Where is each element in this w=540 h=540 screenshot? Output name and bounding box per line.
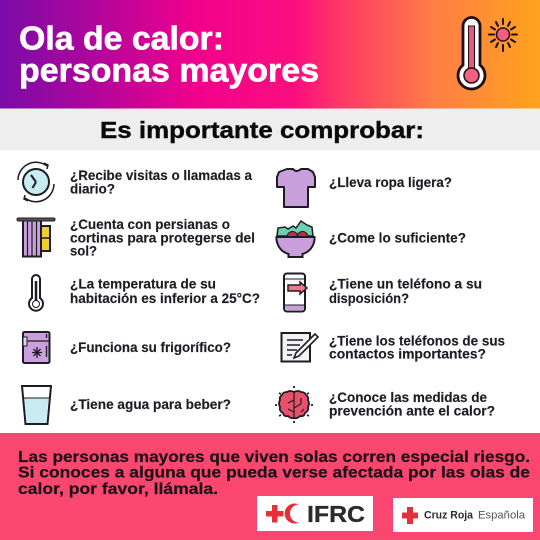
check: blinds: ¿Cuenta con persianas o [70,216,230,232]
footer message: Si conoces a alguna que pueda verse afectada por las olas de [18,464,530,482]
check: clothing: ¿Lleva ropa ligera? [329,174,452,190]
check: blinds: cortinas para protegerse del [70,230,255,246]
check: phone: ¿Tiene un teléfono a su [329,276,482,292]
check: visits [18,162,252,202]
section heading: Es importante comprobar: [100,117,424,143]
logo: IFRC [257,496,373,531]
icon: fridge [23,332,50,363]
check: water: ¿Tiene agua para beber? [70,396,231,412]
check: food [276,221,466,257]
check: prevention [275,386,495,423]
icon: phone with arrow [284,274,307,312]
check: fridge: ¿Funciona su frigorífico? [70,339,231,355]
footer message: calor, por favor, llámala. [18,481,218,498]
check: room temperature [29,275,260,311]
logo: Cruz Roja Española: Española [478,510,526,522]
left column of checks [17,162,260,424]
check: blinds [17,216,255,258]
title: personas mayores [19,52,319,88]
check: contacts: contactos importantes? [329,346,486,362]
check: room temperature: ¿La temperatura de su [70,276,216,292]
check: water [22,386,231,424]
check: contacts [282,332,505,362]
logo: Cruz Roja Española: Cruz Roja [424,510,474,522]
check: blinds: sol? [70,242,97,258]
icon: salad bowl [276,221,314,257]
title [19,20,319,88]
icon: t-shirt [277,169,315,207]
logo: Cruz Roja Española [393,498,533,532]
check: prevention: prevención ante el calor? [329,402,495,418]
check: room temperature: habitación es inferior a 25°C? [70,290,260,306]
footer message: Las personas mayores que viven solas corren especial riesgo. [18,449,530,466]
footer panel [0,433,540,540]
check: visits: diario? [70,180,115,196]
check: contacts: ¿Tiene los teléfonos de sus [329,332,505,348]
section band [0,108,540,150]
header banner [0,0,540,108]
icon: clock [18,162,54,202]
title: Ola de calor: [19,20,224,56]
check: fridge [23,332,231,363]
check: food: ¿Come lo suficiente? [329,230,466,246]
logo: IFRC: IFRC [307,501,365,527]
icon: glass of water [22,386,51,424]
right column of checks [275,169,505,423]
icon: notepad and pen [282,333,318,362]
footer message [18,449,530,498]
icon: thermometer and sun [458,18,517,89]
check: clothing [277,169,452,207]
icon: curtain and window [17,218,55,256]
icon: thermometer [29,275,43,311]
check: phone: disposición? [329,290,409,306]
check: prevention: ¿Conoce las medidas de [329,389,487,405]
check: visits: ¿Recibe visitas o llamadas a [70,167,252,183]
icon: brain [275,386,313,423]
check: phone [284,274,482,312]
